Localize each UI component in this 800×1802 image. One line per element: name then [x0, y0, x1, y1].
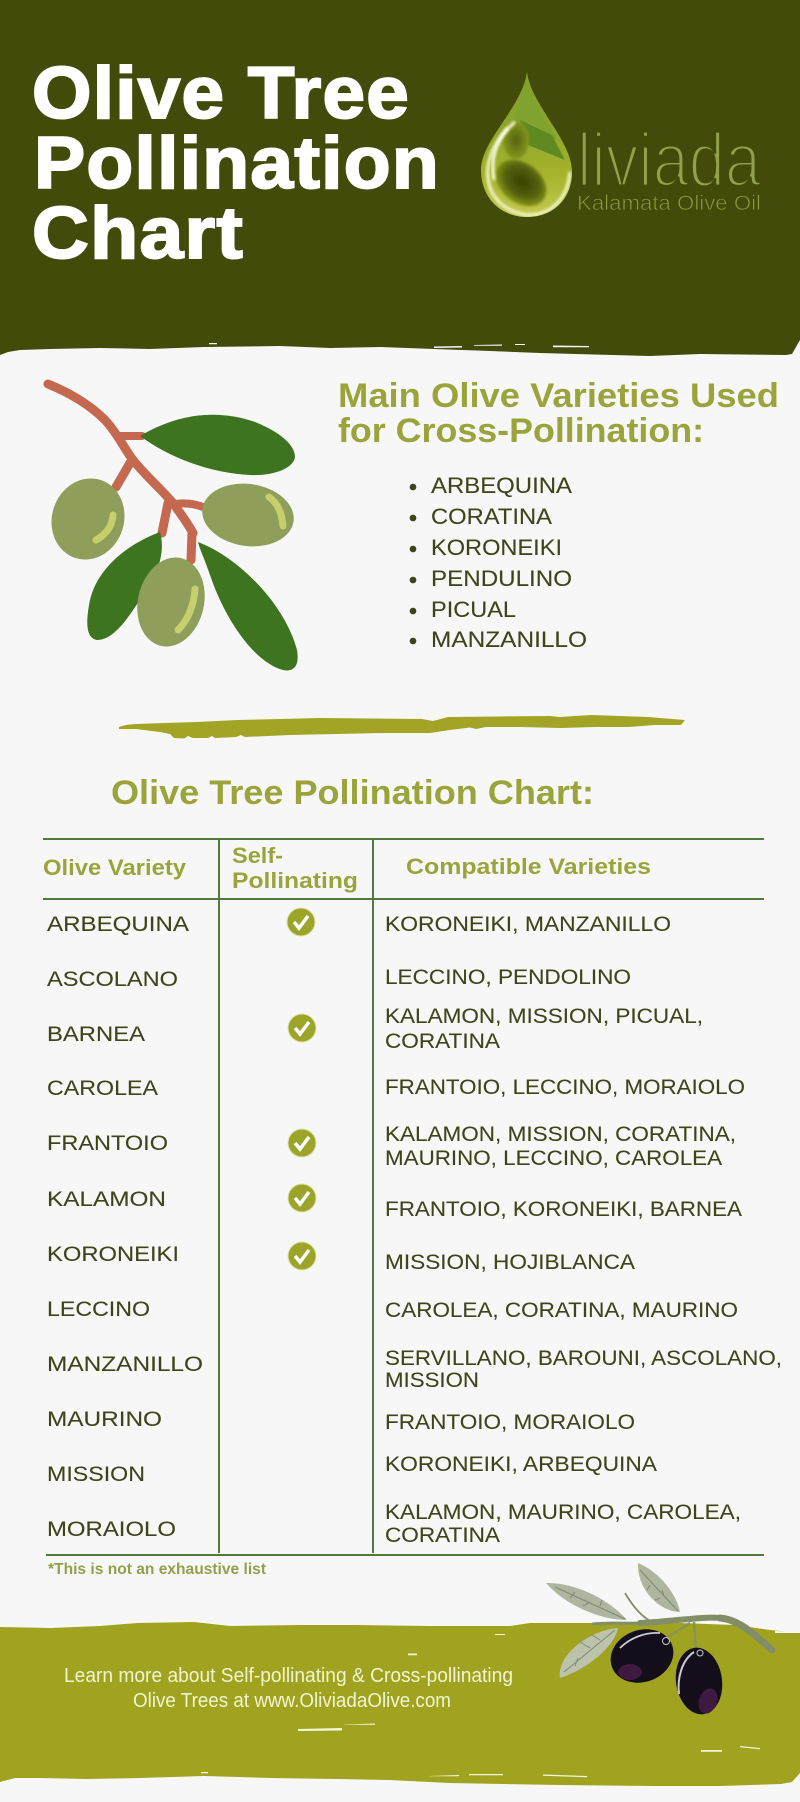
stem — [48, 384, 208, 560]
branch — [593, 1618, 772, 1650]
table header row: Olive Variety — [43, 855, 187, 880]
row: ARBEQUINA: KORONEIKI, MANZANILLO — [385, 912, 671, 936]
leaf: lower — [560, 1628, 618, 1678]
row: MANZANILLO: MANZANILLO — [47, 1352, 203, 1376]
olive: left — [603, 1621, 681, 1691]
leaf: top — [140, 415, 295, 475]
row: KORONEIKI: KORONEIKI — [47, 1242, 179, 1266]
footnote: *This is not an exhaustive list — [48, 1561, 266, 1578]
icon: check — [288, 1014, 316, 1042]
list: cross-pollination varieties: MANZANILLO — [431, 627, 587, 652]
row: MORAIOLO: MORAIOLO — [47, 1517, 176, 1541]
illustration: olive branch — [41, 384, 298, 670]
footer call to action: Olive Trees at www.OliviadaOlive.com — [133, 1690, 451, 1712]
footer call to action: Learn more about Self-pollinating & Cross-pollinating — [64, 1665, 513, 1687]
heading: main varieties: Main Olive Varieties Used — [338, 377, 779, 415]
title: Chart — [32, 193, 244, 274]
row: CAROLEA: CAROLEA — [47, 1076, 159, 1100]
row: LECCINO: CAROLEA, CORATINA, MAURINO — [385, 1298, 738, 1322]
leaf: left — [546, 1583, 627, 1620]
list: cross-pollination varieties: ARBEQUINA — [431, 473, 572, 498]
row: MORAIOLO: CORATINA — [385, 1523, 501, 1547]
list: cross-pollination varieties: CORATINA — [431, 504, 552, 529]
row: ASCOLANO: LECCINO, PENDOLINO — [385, 965, 631, 989]
row: ASCOLANO — [47, 965, 631, 991]
row: CAROLEA: FRANTOIO, LECCINO, MORAIOLO — [385, 1075, 745, 1099]
leaf: lower right — [198, 542, 298, 670]
row: MANZANILLO: SERVILLANO, BAROUNI, ASCOLANO, — [385, 1346, 782, 1370]
row: FRANTOIO: KALAMON, MISSION, CORATINA, — [385, 1122, 736, 1146]
row: KALAMON: KALAMON — [47, 1187, 166, 1211]
heading: main varieties — [338, 377, 779, 450]
olive: bottom — [129, 551, 213, 653]
illustration: black olives on branch — [546, 1563, 772, 1717]
pollination table — [43, 839, 782, 1555]
table grid — [43, 839, 764, 1555]
row: MORAIOLO — [47, 1500, 741, 1547]
icon: check — [288, 1184, 316, 1212]
icon: check — [288, 1129, 316, 1157]
twig — [625, 1593, 650, 1621]
heading: main varieties: for Cross-Pollination: — [338, 412, 704, 450]
olive: left — [41, 469, 135, 569]
header banner — [0, 0, 800, 356]
olive: right — [198, 478, 298, 552]
footer call to action — [64, 1665, 513, 1712]
list: cross-pollination varieties — [410, 473, 587, 652]
row: FRANTOIO — [47, 1122, 736, 1170]
table header row: Self- — [232, 843, 283, 868]
row: ARBEQUINA: ARBEQUINA — [47, 912, 190, 936]
icon: olive oil drop — [481, 72, 572, 217]
row: ASCOLANO: ASCOLANO — [47, 967, 178, 991]
heading: chart: Olive Tree Pollination Chart: — [111, 774, 594, 812]
row: MISSION: KORONEIKI, ARBEQUINA — [385, 1452, 658, 1476]
row: MISSION: MISSION — [47, 1462, 145, 1486]
row: FRANTOIO: MAURINO, LECCINO, CAROLEA — [385, 1146, 723, 1170]
olive: right — [672, 1645, 726, 1717]
row: ARBEQUINA — [47, 908, 671, 936]
title: Olive Tree — [32, 53, 410, 134]
olive stems — [668, 1622, 696, 1650]
row: BARNEA: CORATINA — [385, 1029, 501, 1053]
brush stroke divider — [119, 715, 685, 738]
list: cross-pollination varieties: PENDULINO — [431, 566, 572, 591]
tagline: Kalamata Olive Oil — [577, 192, 761, 215]
row: MORAIOLO: KALAMON, MAURINO, CAROLEA, — [385, 1500, 741, 1524]
footer banner — [0, 1622, 800, 1786]
logo: Oliviada Kalamata Olive Oil — [478, 70, 762, 220]
row: LECCINO: LECCINO — [47, 1297, 150, 1321]
table header row: Pollinating — [232, 868, 358, 893]
list: cross-pollination varieties: KORONEIKI — [431, 535, 562, 560]
row: LECCINO — [47, 1297, 738, 1322]
list: cross-pollination varieties: PICUAL — [431, 597, 516, 622]
table header row — [43, 843, 651, 893]
title: Pollination — [34, 123, 440, 204]
row: BARNEA: BARNEA — [47, 1022, 146, 1046]
row: KORONEIKI — [47, 1242, 636, 1274]
row: BARNEA — [47, 1004, 703, 1053]
icon: check — [287, 908, 315, 936]
leaf: lower left — [87, 532, 162, 640]
row: BARNEA: KALAMON, MISSION, PICUAL, — [385, 1004, 703, 1028]
row: CAROLEA — [47, 1075, 745, 1100]
row: MISSION — [47, 1452, 658, 1486]
row: KALAMON: FRANTOIO, KORONEIKI, BARNEA — [385, 1197, 743, 1221]
row: KORONEIKI: MISSION, HOJIBLANCA — [385, 1250, 636, 1274]
leaf: top — [638, 1563, 680, 1612]
row: FRANTOIO: FRANTOIO — [47, 1131, 168, 1155]
wordmark: liviada — [577, 118, 762, 203]
table header row: Compatible Varieties — [406, 854, 651, 879]
row: MAURINO — [47, 1407, 635, 1434]
row: MANZANILLO — [47, 1346, 782, 1392]
row: MAURINO: MAURINO — [47, 1407, 162, 1431]
row: KALAMON — [47, 1184, 743, 1221]
title — [32, 53, 440, 274]
icon: check — [288, 1242, 316, 1270]
row: MANZANILLO: MISSION — [385, 1368, 479, 1392]
row: MAURINO: FRANTOIO, MORAIOLO — [385, 1410, 635, 1434]
